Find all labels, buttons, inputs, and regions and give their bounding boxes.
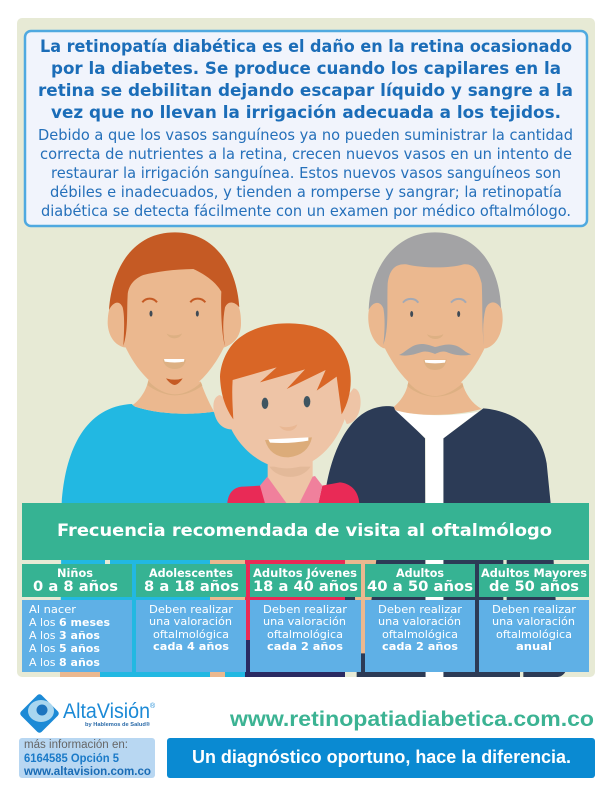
slogan banner: Un diagnóstico oportuno, hace la diferencia. — [192, 747, 571, 767]
column: adultos jóvenes: una valoración — [263, 615, 346, 628]
logo: Alta Visión: ® — [150, 702, 156, 710]
column: niños: A los 6 meses — [29, 616, 110, 629]
column: adultos jóvenes: 18 a 40 años — [253, 579, 358, 595]
logo: Alta Visión: AltaVisión — [63, 700, 150, 723]
column: adolescentes — [136, 564, 246, 672]
column: adultos: Deben realizar — [378, 603, 462, 616]
illustration: family — [60, 232, 568, 677]
column: adolescentes: una valoración — [149, 615, 232, 628]
column: niños — [22, 564, 132, 672]
column: adolescentes: Deben realizar — [149, 603, 233, 616]
body text: diabética se detecta fácilmente con un examen por médico oftalmólogo. — [41, 202, 571, 220]
body text: correcta de nutrientes a la retina, crecen nuevos vasos en un intento de — [40, 145, 572, 163]
column: adultos jóvenes: Adultos Jóvenes — [253, 566, 357, 580]
column: adultos mayores: anual — [516, 640, 552, 653]
heading: vez que no llevan la irrigación adecuada a los tejidos. — [51, 103, 561, 123]
table: recommended visit frequency — [22, 503, 589, 672]
column: niños: A los 5 años — [29, 642, 100, 655]
column: adultos jóvenes: Deben realizar — [263, 603, 347, 616]
heading: La retinopatía diabética es el daño en la retina ocasionado — [40, 37, 572, 57]
column: adultos mayores: Deben realizar — [492, 603, 576, 616]
heading: por la diabetes. Se produce cuando los capilares en la — [51, 59, 561, 79]
contact box: más información en: — [24, 739, 128, 751]
panel: background — [17, 18, 595, 677]
slogan banner — [167, 738, 595, 778]
body text: débiles e inadecuados, y tienden a romperse y sangrar; la retinopatía — [50, 183, 562, 201]
body text: restaurar la irrigación sanguínea. Estos nuevos vasos sanguíneos son — [51, 164, 561, 182]
column: adultos mayores: oftalmológica — [496, 628, 572, 641]
column: adultos: 40 a 50 años — [367, 579, 473, 595]
column: adultos mayores: Adultos Mayores — [481, 566, 587, 580]
table title: Frecuencia recomendada de visita al oftalmólogo — [57, 521, 552, 541]
panel: intro text box — [25, 31, 587, 226]
column: adultos: Adultos — [396, 566, 444, 580]
column: adolescentes: cada 4 años — [153, 640, 229, 653]
column: adultos jóvenes: oftalmológica — [267, 628, 343, 641]
column: adultos jóvenes — [250, 564, 361, 672]
figure: father — [60, 232, 273, 677]
contact box: www.altavision.com.co — [23, 764, 151, 778]
logo: Alta Visión: by Hablemos de Salud® — [85, 721, 150, 728]
column: adultos mayores: una valoración — [492, 615, 575, 628]
icon: eye diamond — [19, 693, 60, 734]
column: niños: A los 8 años — [29, 656, 100, 669]
column: adolescentes: 8 a 18 años — [144, 579, 239, 595]
body text — [38, 126, 573, 220]
column: adultos jóvenes: cada 2 años — [267, 640, 343, 653]
contact box — [19, 738, 155, 778]
logo: Alta Visión — [19, 693, 156, 734]
column: niños: Niños — [57, 566, 93, 580]
website url: www.retinopatiadiabetica.com.co — [229, 708, 594, 731]
table title — [22, 503, 589, 560]
column: niños: Al nacer — [29, 603, 76, 616]
column: adolescentes: Adolescentes — [149, 566, 233, 580]
column: adultos mayores — [479, 564, 589, 672]
heading — [38, 37, 573, 123]
column: adolescentes: oftalmológica — [153, 628, 229, 641]
column: adultos: una valoración — [378, 615, 461, 628]
column: adultos: cada 2 años — [382, 640, 458, 653]
contact box: 6164585 Opción 5 — [24, 751, 119, 765]
column: adultos mayores: de 50 años — [489, 579, 579, 595]
body text: Debido a que los vasos sanguíneos ya no pueden suministrar la cantidad — [38, 126, 573, 144]
column: niños: 0 a 8 años — [33, 579, 118, 595]
figure: boy — [210, 323, 377, 677]
column: adultos — [365, 564, 475, 672]
heading: retina se debilitan dejando escapar líquido y sangre a la — [38, 81, 573, 101]
column: adultos: oftalmológica — [382, 628, 458, 641]
figure: grandfather — [307, 232, 568, 677]
column: niños: A los 3 años — [29, 629, 100, 642]
